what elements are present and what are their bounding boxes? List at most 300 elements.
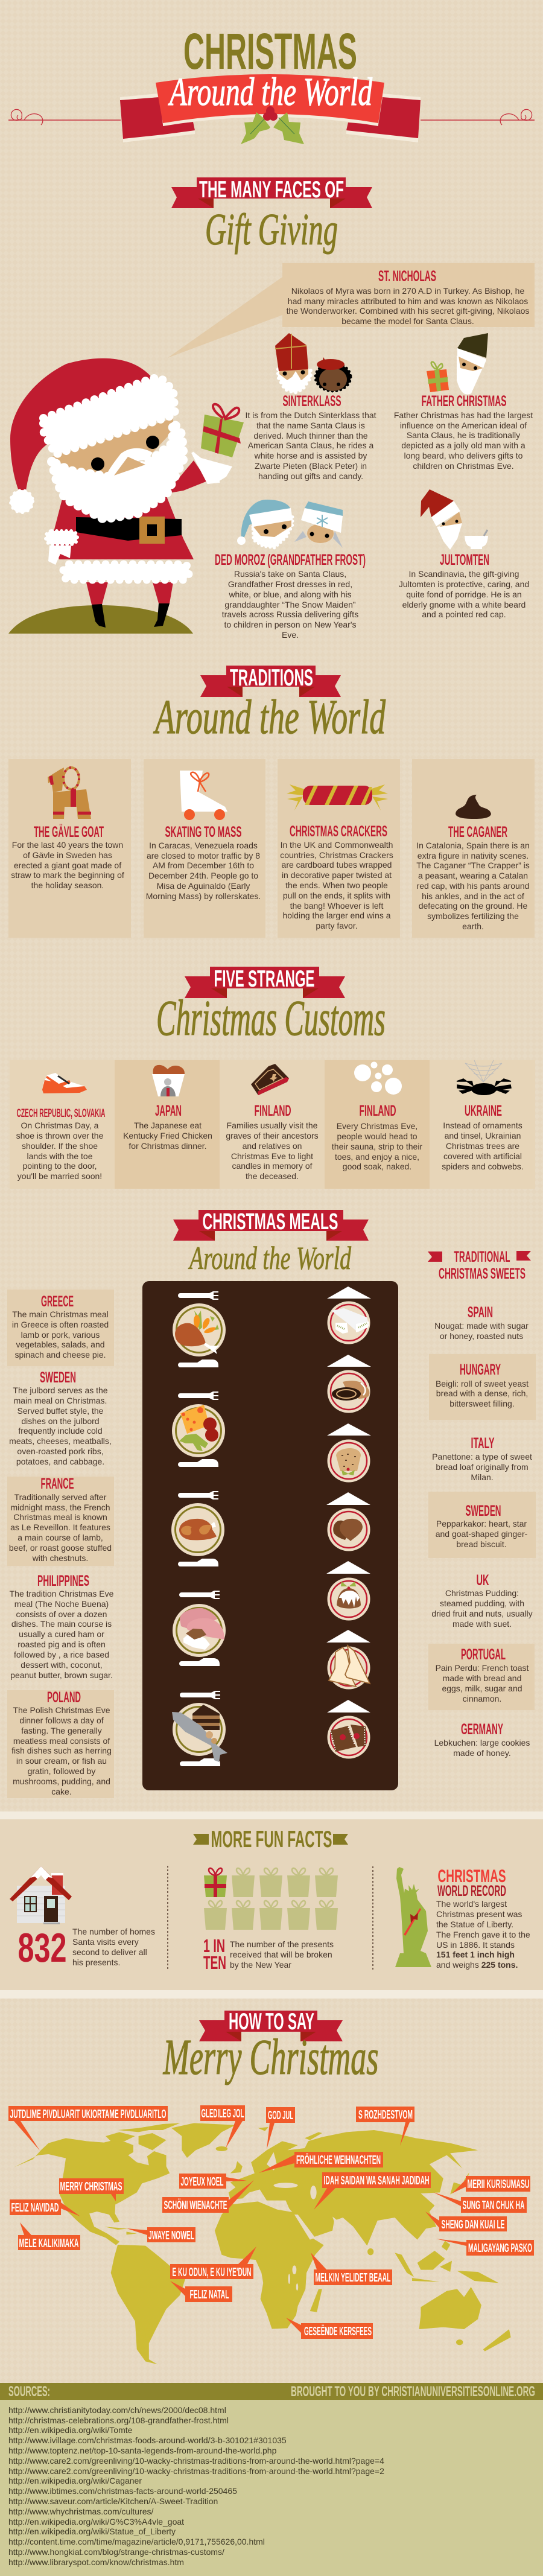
icon: spider and web	[457, 1060, 511, 1095]
ded moroz: Eve.	[282, 630, 299, 640]
sweets: germany	[434, 1721, 530, 1758]
fact: 1 in ten: 1 IN	[203, 1935, 225, 1956]
jultomten: In Scandinavia, the gift-giving	[409, 569, 519, 579]
label: joyeux noel	[179, 2174, 247, 2189]
sinterklass: derived. Much thinner than the	[253, 431, 368, 440]
panel: st nicholas: Nikolaos of Myra was born in 270 A.D in Turkey. As Bishop, he	[291, 286, 524, 296]
sources list: http://en.wikipedia.org/wiki/Caganer	[8, 2476, 142, 2485]
icon: chicken bucket	[152, 1065, 185, 1096]
meals left: france	[7, 1475, 114, 1566]
heading: meals around the world: Around the World	[188, 1240, 352, 1276]
jultomten: elderly gnome with a white beard	[402, 600, 526, 609]
card: christmas crackers: pull on the ends, it splits with	[283, 891, 390, 900]
sweets: uk: dried fruit and nuts, usually	[431, 1609, 533, 1618]
sinterklass: American Santa Claus, he rides a	[248, 440, 373, 450]
sinterklass	[245, 333, 376, 481]
label: idah saidan	[314, 2172, 431, 2210]
custom: japan: The Japanese eat	[134, 1121, 202, 1130]
icon: ten gifts	[204, 1868, 338, 1930]
meals left: greece: GREECE	[41, 1293, 74, 1310]
card: christmas crackers: In the UK and Commonwealth	[281, 840, 393, 850]
sweets: uk: Christmas Pudding:	[445, 1588, 519, 1598]
section: fun facts background	[0, 1811, 543, 1999]
card: gavle goat	[8, 759, 131, 938]
card: the caganer: a peasant, wearing a Catalan	[418, 871, 528, 880]
ded moroz: travels across Russia delivering gifts	[222, 609, 358, 619]
heading: more fun facts: MORE FUN FACTS	[211, 1827, 332, 1852]
meal: greece plate	[173, 1291, 226, 1367]
custom: ukraine: Instead of ornaments	[443, 1121, 522, 1130]
fact: world record: The world's largest	[436, 1899, 507, 1909]
sweet: lebkuchen	[327, 1716, 370, 1758]
label: feliz natal	[170, 2281, 232, 2302]
meals left: france: with chestnuts.	[32, 1553, 88, 1563]
label: melkin yelidet beaal: MELKIN YELIDET BEAAL	[315, 2271, 391, 2285]
sweets: portugal: cinnamon.	[463, 1694, 501, 1703]
fact: 1 in ten: TEN	[203, 1952, 226, 1973]
fact: 832 homes: 832	[18, 1925, 66, 1971]
card: christmas crackers: countries, Christmas Crackers	[280, 850, 393, 860]
meals left: greece: The main Christmas meal	[12, 1309, 109, 1319]
banner: many faces: THE MANY FACES OF	[199, 177, 344, 203]
meals left: philippines: dishes. The main course is	[11, 1619, 112, 1629]
custom: ukraine: UKRAINE	[465, 1102, 502, 1119]
meals left: greece: in Greece is often roasted	[12, 1320, 109, 1329]
custom: czech republic: you'll be married soon!	[17, 1171, 102, 1181]
jultomten: Jultomten is protective, caring, and	[399, 579, 529, 589]
sources list: http://www.care2.com/greenliving/10-wacky-christmas-traditions-from-around-the-world.html?page=4	[8, 2456, 384, 2466]
panel: customs strip	[10, 1060, 535, 1189]
heading: gift giving: Gift Giving	[205, 205, 338, 255]
label: mele kalikimaka	[18, 2222, 80, 2250]
custom: japan	[123, 1065, 212, 1151]
father christmas: children on Christmas Eve.	[413, 461, 514, 471]
label: idah saidan: IDAH SAIDAN WA SANAH JADIDAH	[323, 2174, 430, 2187]
icon: jultomten with porridge	[421, 489, 488, 550]
meals left: philippines: The tradition Christmas Eve	[10, 1589, 114, 1598]
label: jutdlime	[8, 2106, 168, 2151]
icon: house	[10, 1866, 72, 1924]
heading: christmas customs: Christmas Customs	[156, 990, 386, 1046]
meals left: france: a main course of lamb,	[17, 1533, 103, 1542]
custom: japan: JAPAN	[155, 1102, 182, 1119]
jultomten: quite fond of porridge. He is an	[406, 590, 522, 599]
ribbon: Around the World	[168, 70, 373, 114]
icon: holly	[241, 106, 304, 144]
meals left: poland: in sour cream, or fish au	[16, 1756, 107, 1766]
label: geseende kersfees: GESEËNDE KERSFEES	[304, 2324, 372, 2338]
ded moroz: to children in person on New Year's	[224, 620, 357, 629]
sweets: hungary	[429, 1354, 536, 1420]
sources list: http://en.wikipedia.org/wiki/Statue_of_Liberty	[8, 2527, 176, 2536]
custom: finland sauna: people would head to	[337, 1131, 418, 1141]
banner: many faces	[171, 177, 372, 208]
panel: st nicholas	[282, 263, 535, 327]
label: mele kalikimaka: MELE KALIKIMAKA	[19, 2237, 78, 2250]
heading: more fun facts	[193, 1827, 348, 1852]
icon: cracker	[287, 784, 388, 810]
sources list: http://www.ibtimes.com/christmas-facts-around-world-250465	[8, 2486, 237, 2496]
banner: how to say	[199, 2009, 343, 2041]
footer bar: SOURCES:	[8, 2384, 50, 2400]
card: christmas crackers	[278, 759, 400, 938]
sweets: spain	[434, 1304, 529, 1341]
meal: philippines plate	[173, 1591, 226, 1666]
label: geseende kersfees	[286, 2318, 373, 2339]
banner: traditions: TRADITIONS	[230, 665, 313, 691]
sweets: hungary: bittersweet filling.	[449, 1399, 515, 1408]
world map	[14, 2123, 511, 2364]
sinterklass: Zwarte Pieten (Black Peter) in	[255, 461, 367, 471]
custom: finland graves: Families usually visit the	[227, 1121, 318, 1130]
icon: coffin	[251, 1064, 289, 1095]
custom: finland graves: graves of their ancestors	[226, 1131, 319, 1140]
fact: 832 homes: second to deliver all	[72, 1947, 147, 1957]
meals left: france: beef, or roast goose stuffed	[9, 1543, 112, 1553]
sweets: uk	[431, 1572, 533, 1629]
card: the caganer: earth.	[462, 921, 484, 931]
card: gavle goat: the holiday season.	[31, 880, 104, 890]
label: e ku odun: E KU ODUN, E KU IYE'DUN	[173, 2266, 251, 2279]
sweets: portugal: eggs, milk, sugar and	[442, 1684, 522, 1693]
meals left: philippines: followed by , a rice based	[14, 1650, 109, 1659]
meals left: sweden	[9, 1369, 112, 1466]
custom: japan: Kentucky Fried Chicken	[123, 1131, 212, 1140]
custom: finland sauna: FINLAND	[360, 1102, 396, 1119]
title: CHRISTMAS	[183, 23, 357, 80]
sinterklass: white horse and is assisted by	[254, 451, 367, 460]
card: the caganer	[412, 759, 535, 938]
card: skating to mass: AM from December 16th to	[153, 860, 254, 870]
meals left: sweden: The julbord serves as the	[13, 1385, 108, 1395]
heading: around the world: Around the World	[153, 691, 386, 744]
meals left: sweden: meats, cheeses, meatballs,	[9, 1436, 112, 1446]
card: skating to mass: In Caracas, Venezuela roads	[149, 841, 258, 850]
meal: sweden plate	[172, 1391, 225, 1467]
sweet: pepparkakor	[327, 1509, 370, 1551]
custom: finland sauna: Every Christmas Eve,	[337, 1121, 418, 1131]
meals left: poland	[7, 1689, 114, 1798]
sources list: http://www.libraryspot.com/know/christmas.htm	[8, 2557, 184, 2567]
map seas	[267, 2152, 343, 2291]
card: gavle goat: straw to mark the beginning of	[11, 870, 124, 880]
meals left: poland: The Polish Christmas Eve	[13, 1705, 110, 1715]
custom: czech republic: On Christmas Day, a	[21, 1121, 99, 1130]
footer bar	[0, 2383, 543, 2400]
father christmas: Santa Claus, he is traditionally	[407, 430, 520, 440]
banner: how to say: HOW TO SAY	[229, 2009, 314, 2035]
custom: czech republic: shoulder. If the shoe	[22, 1141, 98, 1151]
card: the caganer: defecating on the ground. He	[419, 901, 528, 911]
label: jutdlime: JUTDLIME PIVDLUARIT UKIORTAME PIVDLUARITLO	[10, 2108, 167, 2121]
sweets: spain: Nougat: made with sugar	[434, 1321, 529, 1331]
sources list: http://www.saveur.com/article/Kitchen/A-Sweet-Tradition	[8, 2496, 218, 2506]
fact: 832 homes: his presents.	[72, 1957, 120, 1967]
card: skating to mass: Misa de Aguinaldo (Early	[157, 881, 250, 891]
meals left: greece	[7, 1290, 114, 1366]
jultomten	[399, 489, 529, 619]
sweet: beigli	[327, 1370, 370, 1413]
meals left: sweden: dishes on the julbord	[21, 1416, 100, 1426]
fact: 832 homes: The number of homes	[72, 1927, 155, 1936]
meals left: greece: spinach and cheese pie.	[14, 1350, 106, 1360]
father christmas: depicted as a jolly old man with a	[401, 440, 526, 450]
label: e ku odun	[170, 2247, 256, 2279]
speech pointer	[168, 277, 282, 358]
custom: czech republic: shoe is thrown over the	[16, 1131, 104, 1140]
sweets: germany: made of honey.	[453, 1748, 511, 1758]
card: the caganer: extra figure in nativity scenes.	[418, 851, 529, 860]
fact: 832 homes: Santa visits every	[72, 1937, 139, 1947]
sweets: sweden: and goat-shaped ginger-	[436, 1529, 528, 1539]
card: gavle goat: of Gävle in Sweden has	[23, 850, 112, 860]
icon: sinterklass and zwarte piet	[275, 333, 351, 393]
custom: czech republic: pointing to the door,	[23, 1161, 97, 1171]
custom: finland graves: candles in memory of	[232, 1161, 313, 1171]
meals left: poland: gratin, followed by	[28, 1766, 95, 1776]
card: christmas crackers: in decorative paper twisted at	[282, 870, 392, 880]
ded moroz: DED MOROZ (GRANDFATHER FROST)	[215, 552, 366, 568]
fact: 1 in ten	[203, 1868, 338, 1973]
label: jwaye nowel	[127, 2227, 195, 2242]
custom: czech republic: CZECH REPUBLIC, SLOVAKIA	[17, 1107, 106, 1120]
sinterklass: SINTERKLASS	[282, 393, 341, 410]
label: merry christmas: MERRY CHRISTMAS	[60, 2180, 122, 2193]
label: merry christmas	[59, 2178, 124, 2201]
card: the caganer: his ankles, and in the act of	[422, 891, 524, 901]
card: skating to mass	[144, 759, 265, 938]
jultomten: JULTOMTEN	[440, 552, 489, 568]
meals left: philippines: consists of over a dozen	[16, 1609, 107, 1619]
custom: finland graves: and relatives on	[243, 1141, 302, 1151]
heading: merry christmas: Merry Christmas	[163, 2029, 379, 2085]
meals left: poland: cake.	[51, 1787, 72, 1796]
meals left: france: Christmas meal is known	[13, 1512, 107, 1522]
card: skating to mass: December 24th. People go to	[148, 871, 258, 880]
sweets: spain: SPAIN	[468, 1304, 493, 1321]
card: the caganer: The Caganer “The Crapper” is	[416, 860, 530, 870]
panel: dining table	[142, 1281, 398, 1790]
meals left: philippines: PHILIPPINES	[37, 1573, 89, 1589]
ded moroz	[215, 500, 366, 640]
meals left: philippines: meal (The Noche Buena)	[14, 1599, 109, 1609]
card: skating to mass: Morning Mass) by rollerskates.	[146, 891, 261, 901]
meals left: poland: fasting. The generally	[21, 1726, 102, 1735]
ded moroz: Russia's take on Santa Claus,	[234, 569, 346, 579]
panel: st nicholas: had many miracles attributed to him and was known as Nikolaos	[288, 296, 528, 306]
icon: bubbles	[354, 1062, 402, 1095]
banner: five strange	[185, 966, 345, 998]
label: maligayang pasko	[436, 2239, 534, 2256]
fact: 1 in ten: by the New Year	[230, 1960, 291, 1970]
custom: ukraine: Christmas trees are	[446, 1141, 519, 1151]
ribbon	[120, 70, 421, 142]
label: sung tan chuk ha	[433, 2192, 527, 2213]
sweets: sweden: Pepparkakor: heart, star	[436, 1519, 527, 1528]
sweets heading	[428, 1248, 531, 1282]
label: gledileg jol	[200, 2105, 245, 2148]
card: the caganer: symbolizes fertilizing the	[427, 911, 519, 921]
custom: finland graves: Christmas Eve to light	[231, 1151, 313, 1161]
label: feliz natal: FELIZ NATAL	[189, 2288, 229, 2301]
father christmas	[394, 333, 533, 471]
sources list: http://www.christianitytoday.com/ch/news/2000/dec08.html	[8, 2405, 226, 2415]
label: melkin yelidet beaal	[311, 2253, 392, 2285]
meals left: poland: mushrooms, pudding, and	[13, 1776, 110, 1786]
sources list: http://www.hongkiat.com/blog/strange-christmas-customs/	[8, 2547, 224, 2557]
sweets: sweden: SWEDEN	[466, 1503, 501, 1519]
sources list: http://en.wikipedia.org/wiki/Tomte	[8, 2425, 133, 2435]
sweets: portugal	[428, 1644, 535, 1710]
ded moroz: white, or blue, and along with his	[228, 590, 352, 599]
ded moroz: Grandfather Frost dresses in red,	[228, 579, 352, 589]
icon: shoe	[42, 1073, 87, 1093]
meals left: philippines: peanut butter, brown sugar.	[10, 1670, 113, 1680]
sweets: italy: Panettone: a type of sweet	[432, 1452, 532, 1461]
card: christmas crackers: the bang! Whoever is left	[290, 901, 384, 911]
sweet: panettone	[327, 1440, 370, 1482]
icon: roller skate	[180, 771, 227, 820]
sources list: http://www.ivillage.com/christmas-foods-around-world/3-b-301021#301035	[8, 2435, 287, 2445]
card: the caganer: red cap, with his pants around	[417, 881, 529, 891]
meals left: sweden: frequently include cold	[18, 1426, 103, 1436]
sweets: italy: Milan.	[471, 1472, 494, 1482]
custom: finland graves: the deceased.	[246, 1171, 299, 1181]
custom: ukraine	[442, 1060, 524, 1171]
label: god jul	[266, 2107, 295, 2149]
fact: world record	[395, 1866, 530, 1970]
meals left: france: Traditionally served after	[14, 1492, 107, 1502]
panel: st nicholas: ST. NICHOLAS	[378, 268, 436, 285]
custom: finland sauna: their sauna, strip to their	[332, 1142, 422, 1151]
label: feliz navidad: FELIZ NAVIDAD	[11, 2201, 59, 2215]
sources list: http://christmas-celebrations.org/108-grandfather-frost.html	[8, 2415, 229, 2425]
custom: ukraine: spiders and cobwebs.	[442, 1162, 524, 1171]
sweet: christmas pudding	[327, 1577, 370, 1621]
fact: world record: CHRISTMAS	[438, 1866, 506, 1886]
meals left: poland: POLAND	[47, 1689, 81, 1706]
meals left: poland: meatless meal consists of	[13, 1736, 110, 1746]
meals left: philippines: dessert with, coconut,	[21, 1660, 103, 1670]
fact: world record: and weighs 225 tons.	[436, 1960, 518, 1970]
label: joyeux noel: JOYEUX NOEL	[181, 2175, 223, 2189]
card: christmas crackers: are cardboard tubes wrapped	[282, 860, 392, 870]
sweets: hungary: bread with a dense, rich,	[436, 1388, 528, 1398]
sweets: portugal: Pain Perdu: French toast	[436, 1663, 529, 1673]
sweets: spain: or honey, roasted nuts	[440, 1331, 523, 1341]
custom: finland sauna: toes, and enjoy a nice,	[335, 1152, 419, 1162]
title	[8, 23, 535, 144]
card: christmas crackers: holding the larger end wins a	[282, 911, 391, 920]
sources list: http://www.whychristmas.com/cultures/	[8, 2507, 154, 2516]
card: skating to mass: are closed to motor traffic by 8	[147, 851, 260, 860]
meals left: sweden: potatoes, and cabbage.	[16, 1457, 104, 1466]
fact: world record: 151 feet 1 inch high	[436, 1950, 515, 1959]
label: god jul: GOD JUL	[268, 2109, 293, 2122]
card: the caganer: In Catalonia, Spain there is an	[416, 841, 530, 850]
panel: st nicholas: the Wonderworker. Combined with his secret gift-giving, Nikolaos	[287, 306, 529, 316]
sweets: uk: steamed pudding, with	[440, 1598, 524, 1608]
custom: finland sauna	[332, 1062, 422, 1171]
father christmas: Father Christmas has had the largest	[394, 410, 533, 420]
label: schoni wienachte	[162, 2180, 254, 2213]
meals left: france: FRANCE	[41, 1475, 74, 1492]
sources list: http://www.toptenz.net/top-10-santa-legends-from-around-the-world.php	[8, 2446, 277, 2455]
icon: statue of liberty	[395, 1867, 431, 1967]
sweet: pain perdu	[327, 1646, 370, 1690]
meal: poland plate	[172, 1691, 227, 1766]
banner: christmas meals: CHRISTMAS MEALS	[203, 1209, 338, 1235]
sweets: italy: ITALY	[471, 1435, 495, 1452]
custom: finland graves: FINLAND	[255, 1102, 291, 1119]
panel: st nicholas: became the model for Santa Claus.	[341, 316, 474, 326]
banner: traditions	[200, 665, 341, 697]
meals left: france: midnight mass, the French	[11, 1503, 110, 1512]
label: frohliche weihnachten	[259, 2152, 383, 2173]
sources list	[0, 2400, 543, 2576]
label: jwaye nowel: JWAYE NOWEL	[148, 2229, 194, 2242]
meals left: france: as Le Reveillon. It features	[10, 1522, 110, 1532]
fact: world record: Christmas present was	[436, 1909, 522, 1919]
meals left: sweden: Served buffet style, the	[17, 1406, 104, 1416]
sweets: italy	[432, 1435, 532, 1482]
custom: finland sauna: good soak, naked.	[343, 1162, 411, 1171]
icon: santa	[8, 358, 244, 634]
fact: world record: US in 1886. It stands	[436, 1940, 515, 1950]
banner: christmas meals	[173, 1209, 369, 1241]
sweets: hungary: Beigli: roll of sweet yeast	[436, 1379, 529, 1388]
sweets: germany: GERMANY	[461, 1721, 503, 1738]
card: gavle goat: THE GÄVLE GOAT	[34, 824, 104, 841]
ded moroz: granddaughter “The Snow Maiden”	[224, 600, 356, 609]
sweets: sweden	[428, 1492, 536, 1558]
label: s rozhdestvom	[356, 2107, 414, 2146]
card: christmas crackers: CHRISTMAS CRACKERS	[290, 823, 387, 840]
sweets: portugal: made with bread and	[443, 1673, 521, 1683]
sweets: uk: UK	[477, 1572, 489, 1589]
label: sheng dan kuai le	[425, 2212, 507, 2231]
card: christmas crackers: party favor.	[316, 921, 358, 930]
meals left: greece: vegetables, salads, and	[16, 1340, 105, 1349]
label: frohliche weihnachten: FRÖHLICHE WEIHNACHTEN	[296, 2153, 381, 2167]
sinterklass: It is from the Dutch Sinterklass that	[245, 410, 376, 420]
meals left: philippines: usually a cured ham or	[19, 1629, 104, 1639]
sources list: http://en.wikipedia.org/wiki/G%C3%A4vle_goat	[8, 2517, 184, 2527]
sinterklass: handing out gifts and candy.	[258, 471, 363, 481]
father christmas: influence on the American ideal of	[400, 421, 527, 430]
icon: father christmas	[427, 333, 488, 395]
meal: france plate	[171, 1491, 224, 1566]
sweets: germany: Lebkuchen: large cookies	[434, 1738, 530, 1748]
sinterklass: that the name Santa Claus is	[256, 421, 365, 430]
label: s rozhdestvom: S ROZHDESTVOM	[358, 2108, 413, 2122]
meals left: greece: lamb or pork, various	[21, 1330, 100, 1340]
label: feliz navidad	[10, 2199, 80, 2216]
father christmas: long beard, who delivers gifts to	[404, 451, 523, 460]
icon: caganer figure	[456, 795, 491, 819]
fact: 1 in ten: The number of the presents	[230, 1939, 334, 1949]
meals left: sweden: oven-roasted pork ribs,	[17, 1446, 104, 1456]
label: schoni wienachte: SCHÖNI WIENACHTE	[164, 2198, 227, 2212]
meals left: sweden: main meal on Christmas.	[14, 1396, 107, 1405]
custom: czech republic: lands with the toe	[27, 1151, 93, 1161]
jultomten: and a pointed red cap.	[422, 609, 506, 619]
icon: ded moroz and snow maiden	[237, 500, 343, 548]
sweets: italy: bread loaf originally from	[436, 1462, 529, 1472]
custom: ukraine: and tinsel, Ukrainian	[445, 1131, 521, 1140]
card: gavle goat: For the last 40 years the town	[12, 840, 123, 850]
meals left: philippines	[10, 1573, 114, 1680]
